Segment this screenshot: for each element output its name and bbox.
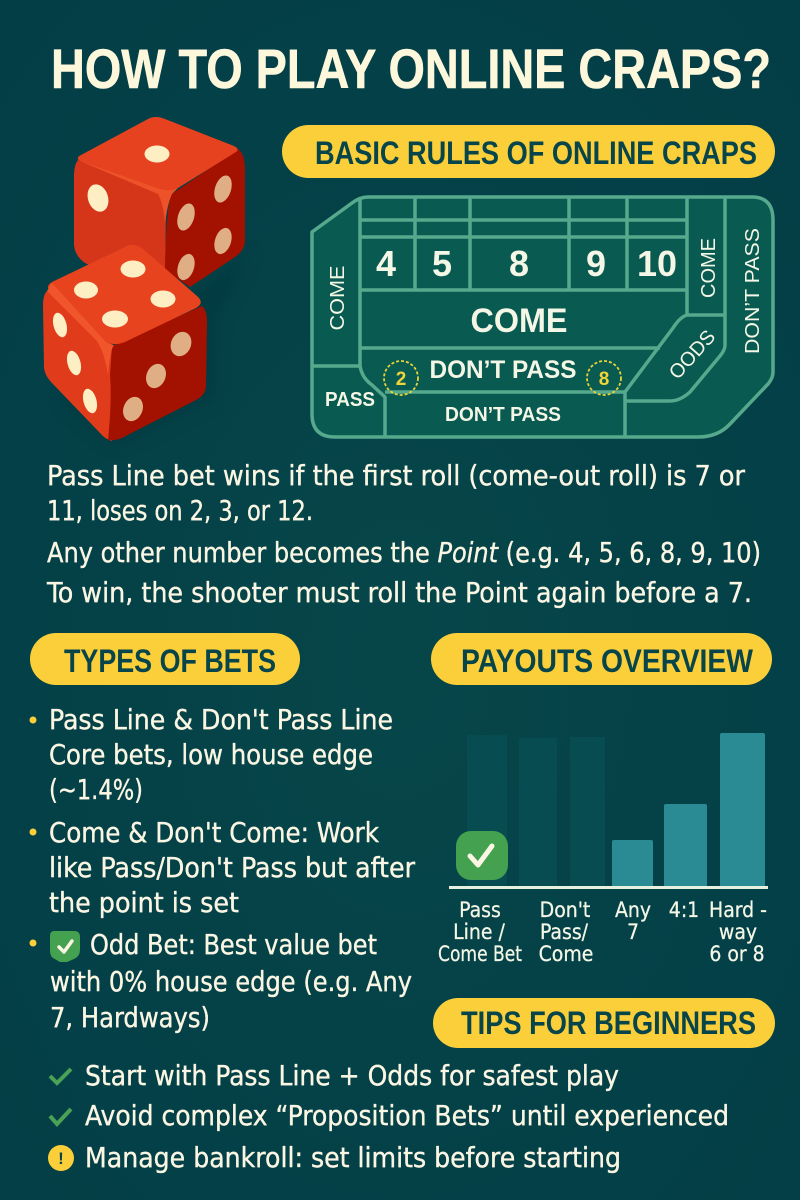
- heading: types of bets: TYPES OF BETS: [64, 643, 276, 679]
- heading: payouts overview: [431, 633, 772, 685]
- text block: rules: 11, loses on 2, 3, or 12.: [47, 494, 313, 527]
- bullet: odd bet: with 0% house edge (e.g. Any: [50, 965, 412, 998]
- table numbers: 5: [432, 243, 452, 284]
- bar labels: [438, 898, 767, 966]
- text block: rules: Pass Line bet wins if the first roll (come-out roll) is 7 or: [47, 459, 746, 492]
- bar labels: Any: [615, 898, 651, 922]
- bar labels: 4:1: [669, 898, 699, 922]
- bullet: pass line: (~1.4%): [49, 773, 143, 806]
- table numbers: [376, 243, 677, 284]
- tip: manage bankroll: !: [58, 1149, 64, 1168]
- bar labels: Pass: [459, 898, 501, 922]
- table numbers: 4: [376, 243, 396, 284]
- table labels: COME: [698, 238, 720, 298]
- table labels: COME: [470, 302, 568, 340]
- table numbers: 8: [509, 243, 529, 284]
- text block: rules: Any other number becomes the Point (e.g. 4, 5, 6, 8, 9, 10): [47, 536, 761, 569]
- bullet: come: Come & Don't Come: Work: [49, 816, 379, 849]
- list: tips: [48, 1059, 729, 1174]
- die: back: [74, 117, 245, 300]
- die: front: [43, 245, 207, 441]
- bullet: pass line: Core bets, low house edge: [49, 738, 373, 771]
- bullet: pass line: [30, 703, 393, 806]
- bar labels: Come Bet: [438, 942, 522, 966]
- heading: basic rules: [282, 125, 775, 178]
- heading: tips for beginners: [433, 998, 775, 1048]
- table labels: [325, 228, 764, 426]
- tip: manage bankroll: Manage bankroll: set limits before starting: [85, 1141, 621, 1174]
- bullet: come: like Pass/Don't Pass but after: [49, 851, 416, 884]
- bullet: odd bet: 7, Hardways): [50, 1001, 210, 1034]
- table labels: DON’T PASS: [430, 356, 576, 384]
- text block: rules: To win, the shooter must roll the Point again before a 7.: [46, 576, 752, 609]
- table labels: DON’T PASS: [742, 228, 764, 354]
- table labels: DON’T PASS: [445, 404, 561, 426]
- icon: green shield check: [50, 931, 80, 962]
- bar labels: 6 or 8: [709, 942, 765, 966]
- bar labels: Hard -: [709, 898, 767, 922]
- tip: avoid proposition bets: Avoid complex “Proposition Bets” until experienced: [85, 1099, 729, 1132]
- point markers: 2: [396, 369, 406, 390]
- heading: tips for beginners: TIPS FOR BEGINNERS: [461, 1005, 756, 1041]
- faded bars: [467, 735, 605, 887]
- bar labels: Come: [539, 942, 593, 966]
- bullet: odd bet: Odd Bet: Best value bet: [90, 928, 377, 961]
- bar labels: Pass/: [540, 920, 589, 944]
- bullet: come: [30, 816, 416, 919]
- bullet: odd bet: [30, 928, 412, 1034]
- craps table diagram: [312, 197, 773, 437]
- bar labels: Line /: [453, 920, 505, 944]
- point markers: 8: [599, 369, 609, 390]
- point markers: [384, 361, 621, 395]
- bar labels: Don't: [540, 898, 590, 922]
- bullet: come: the point is set: [49, 886, 239, 919]
- solid bars: [612, 733, 765, 887]
- bullet: pass line: Pass Line & Don't Pass Line: [49, 703, 393, 736]
- list: types of bets: [30, 703, 416, 1034]
- bar labels: 7: [627, 920, 639, 944]
- icon: green check badge: [456, 831, 508, 880]
- table labels: COME: [327, 266, 349, 330]
- bar chart: payouts: [438, 733, 768, 966]
- heading: payouts overview: PAYOUTS OVERVIEW: [461, 643, 754, 679]
- table numbers: 10: [637, 243, 677, 284]
- table labels: PASS: [325, 389, 375, 411]
- icon: red dice: [43, 117, 250, 445]
- text block: rules: [46, 459, 761, 609]
- table labels: OODS: [665, 326, 720, 384]
- table numbers: 9: [586, 243, 606, 284]
- heading: types of bets: [30, 633, 300, 685]
- tip: start with pass line: Start with Pass Line + Odds for safest play: [85, 1059, 619, 1092]
- bar labels: way: [719, 920, 757, 944]
